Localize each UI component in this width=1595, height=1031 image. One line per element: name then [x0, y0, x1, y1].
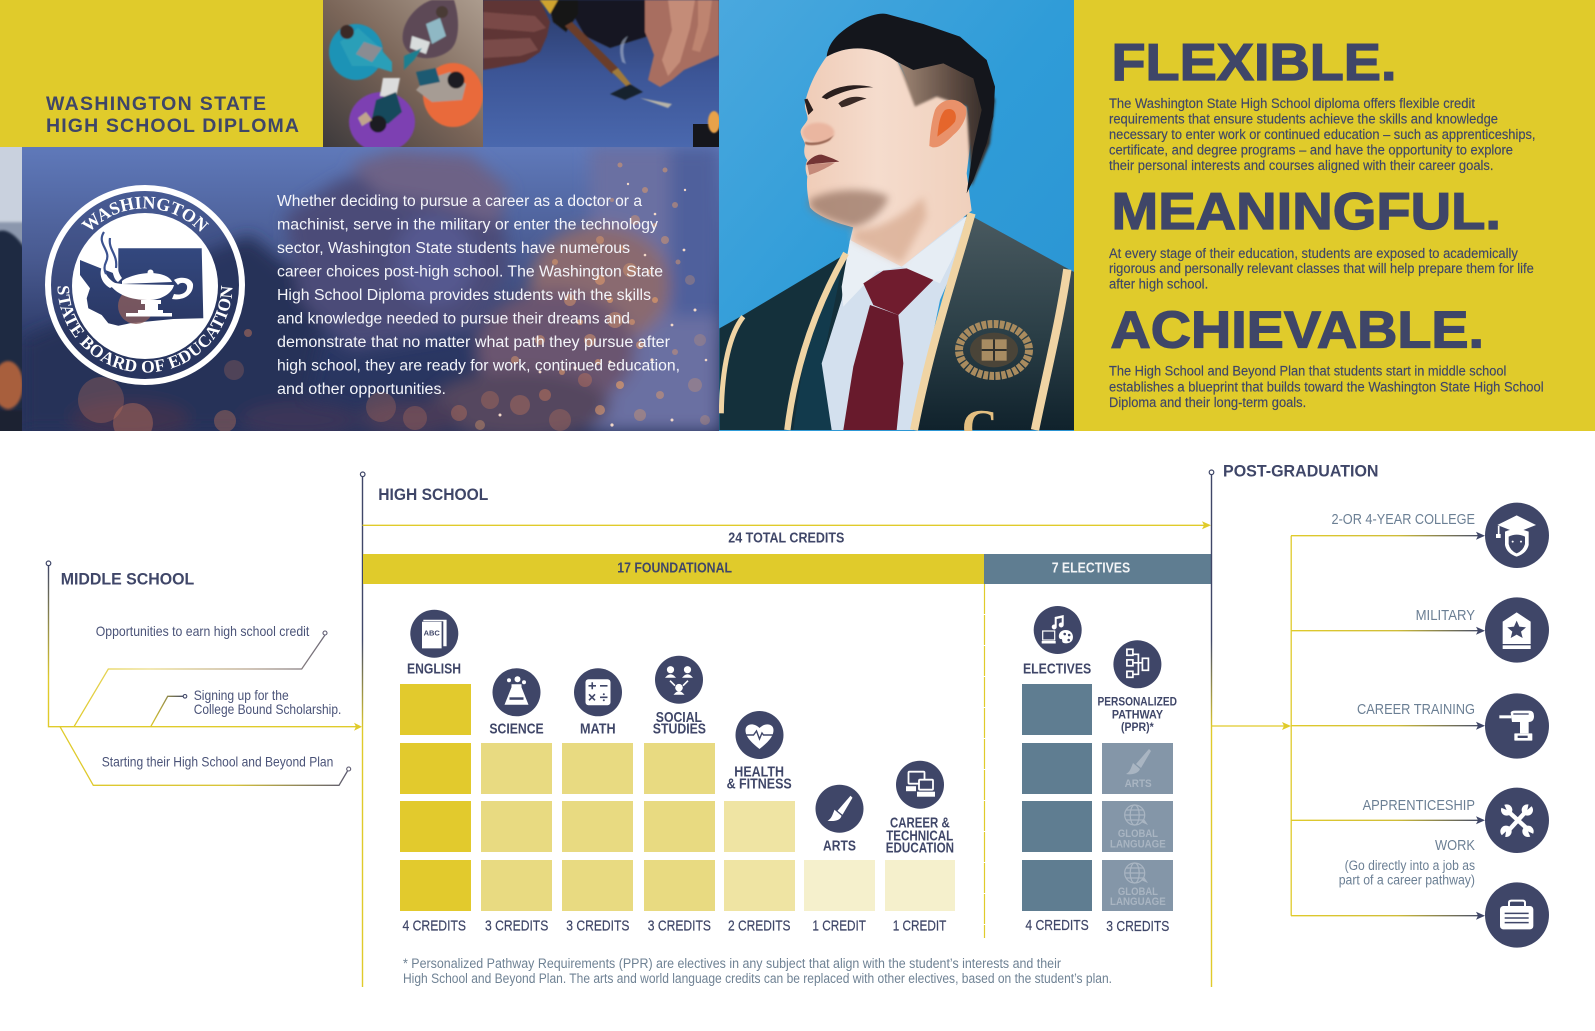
state outline: [80, 248, 203, 326]
column: english: [400, 610, 471, 934]
text: flexible: [1109, 96, 1536, 173]
heading: high school: HIGH SCHOOL: [378, 485, 488, 504]
bar: electives: [984, 554, 1211, 584]
heading: post-graduation: POST-GRADUATION: [1223, 462, 1378, 481]
column: science: [481, 668, 552, 934]
tie: [863, 268, 933, 315]
label: career training: CAREER TRAINING: [1357, 701, 1475, 718]
footnote: High School and Beyond Plan. The arts and world language credits can be replaced with other electives, based on the student’s plan.: [403, 971, 1112, 986]
title: HIGH SCHOOL DIPLOMA: [46, 115, 299, 137]
intro paragraph: sector, Washington State students have numerous: [277, 240, 630, 257]
icon: paint brush: [816, 785, 864, 833]
panel: flexible meaningful achievable: [1074, 0, 1595, 431]
icon: briefcase: [1485, 882, 1549, 948]
column: health and fitness: 2 CREDITS: [728, 918, 790, 934]
arrow: [354, 723, 362, 731]
column: career and technical education: 1 CREDIT: [893, 918, 946, 934]
intro paragraph: career choices post-high school. The Washington State: [277, 264, 663, 280]
text: meaningful: [1109, 246, 1534, 292]
intro paragraph: and knowledge needed to pursue their dreams and: [277, 310, 630, 328]
column: social studies: [644, 656, 715, 934]
intro paragraph: [277, 193, 680, 398]
icon: wrenches: [1485, 788, 1549, 853]
column: health and fitness: [724, 711, 795, 934]
connector: high school credit: [74, 635, 325, 727]
label: work: [1339, 837, 1475, 887]
bar: foundational: 17 FOUNDATIONAL: [617, 561, 732, 577]
text: scholarship: College Bound Scholarship.: [194, 701, 341, 717]
tile: global language: LANGUAGE: [1110, 838, 1166, 850]
panel: title block: [0, 0, 323, 147]
column: career and technical education: TECHNICAL: [886, 827, 953, 844]
intro paragraph: Whether deciding to pursue a career as a doctor or a: [277, 193, 642, 210]
column: career and technical education: CAREER &: [890, 815, 950, 832]
intro paragraph: and other opportunities.: [277, 381, 446, 398]
column: arts: ARTS: [823, 838, 856, 855]
column: science: 3 CREDITS: [485, 918, 548, 934]
column: personalized pathway: (PPR)*: [1121, 720, 1154, 734]
column: electives: ELECTIVES: [1023, 661, 1091, 678]
ear: [929, 100, 966, 147]
text: flexible: their personal interests and courses aligned with their career goals.: [1109, 158, 1494, 173]
heading: middle school: MIDDLE SCHOOL: [61, 570, 194, 589]
label: apprenticeship: APPRENTICESHIP: [1363, 797, 1475, 814]
column: arts: 1 CREDIT: [812, 918, 866, 934]
column: english: ENGLISH: [407, 661, 461, 678]
text: meaningful: At every stage of their education, students are exposed to academically: [1109, 246, 1518, 261]
heading: meaningful: MEANINGFUL.: [1112, 183, 1501, 241]
column: math: 3 CREDITS: [566, 918, 629, 934]
text: scholarship: Signing up for the: [194, 687, 289, 703]
column: social studies: SOCIAL: [656, 709, 702, 726]
intro paragraph: High School Diploma provides students with the skills: [277, 287, 651, 304]
flame: [102, 232, 116, 274]
column: health and fitness: & FITNESS: [727, 776, 792, 793]
seal lettering: STATE BOARD OF EDUCATION: [58, 286, 233, 373]
branches: [1291, 536, 1484, 916]
photo: soldering: [483, 0, 720, 147]
column: career and technical education: EDUCATION: [886, 840, 954, 857]
tile: global language: GLOBAL: [1118, 828, 1158, 840]
tile: global language: LANGUAGE: [1110, 896, 1166, 908]
column: personalized pathway: [1098, 640, 1177, 935]
icon: military badge: [1485, 597, 1549, 663]
photo: students on beanbags: [323, 0, 483, 152]
label: work: WORK: [1435, 837, 1475, 854]
crest: [959, 324, 1029, 376]
text: achievable: The High School and Beyond Plan that students start in middle school: [1109, 364, 1506, 378]
column: health and fitness: HEALTH: [734, 764, 784, 781]
connector: beyond plan: [60, 727, 348, 785]
column: personalized pathway: PERSONALIZED: [1098, 694, 1177, 708]
tile: global language: [1102, 860, 1173, 911]
panel: post-graduation: [1209, 462, 1549, 987]
intro paragraph: demonstrate that no matter what path they pursue after: [277, 334, 670, 351]
icon: flowchart: [1113, 640, 1161, 688]
text: meaningful: rigorous and personally relevant classes that will help prepare them for life: [1109, 261, 1534, 276]
cream trim: [721, 213, 1067, 430]
nose shadow: [802, 123, 834, 143]
label: work: part of a career pathway): [1339, 872, 1475, 887]
column: math: [562, 668, 633, 934]
label: military: MILITARY: [1416, 607, 1475, 624]
column: personalized pathway: PATHWAY: [1112, 708, 1163, 722]
panel: intro band with photo background: [22, 147, 719, 431]
column: science: SCIENCE: [489, 721, 544, 738]
text: scholarship: [194, 687, 341, 717]
brow and eye: [822, 85, 873, 99]
tile: global language: GLOBAL: [1118, 886, 1158, 898]
seal lettering: WASHINGTON: [81, 196, 210, 232]
column: english: 4 CREDITS: [402, 918, 466, 934]
column: electives: 4 CREDITS: [1025, 918, 1089, 934]
text: meaningful: after high school.: [1109, 276, 1208, 292]
seal lettering: [58, 196, 233, 373]
text: achievable: establishes a blueprint that builds toward the Washington State High School: [1109, 380, 1544, 394]
icon: people network: [655, 656, 703, 704]
text: achievable: [1109, 364, 1544, 410]
icon: drill: [1485, 693, 1549, 759]
column: social studies: STUDIES: [653, 721, 706, 738]
bar: foundational: [363, 554, 984, 584]
text: flexible: certificate, and degree programs – and have the opportunity to explore: [1109, 142, 1513, 158]
column: electives: [1022, 606, 1092, 934]
heading: flexible: FLEXIBLE.: [1112, 34, 1396, 92]
arrow: total credits: [362, 521, 1211, 529]
footnote: [403, 956, 1112, 986]
column: math: MATH: [580, 721, 616, 738]
column: personalized pathway: 3 CREDITS: [1106, 919, 1169, 935]
bar: electives: 7 ELECTIVES: [1052, 561, 1130, 577]
icons: outcomes: [1485, 503, 1549, 948]
shirt: [822, 217, 967, 430]
icon: graduate: [1485, 503, 1549, 568]
gown letter: C: [962, 398, 998, 454]
icon: calculator: [574, 668, 622, 716]
column: career and technical education: [885, 761, 955, 934]
gown: [719, 253, 850, 430]
icon: book: ABC: [424, 629, 440, 638]
label: college: 2-OR 4-YEAR COLLEGE: [1332, 511, 1475, 528]
connector: scholarship: [151, 696, 183, 727]
footnote: * Personalized Pathway Requirements (PPR) are electives in any subject that align with the student’s interests and their: [403, 956, 1061, 971]
panel: high school: [360, 472, 1211, 987]
text: beyond plan: Starting their High School and Beyond Plan: [102, 754, 333, 770]
lamp: [101, 256, 193, 316]
icon: book: [410, 610, 458, 658]
tile: arts: [1102, 743, 1173, 794]
text: achievable: Diploma and their long-term goals.: [1109, 395, 1306, 410]
photo: graduate student: [719, 0, 1077, 454]
intro paragraph: high school, they are ready for work, continued education,: [277, 358, 680, 374]
tile: global language: [1102, 801, 1173, 852]
tile: arts: ARTS: [1125, 778, 1152, 790]
label: work: (Go directly into a job as: [1345, 858, 1475, 873]
icon: heart: [736, 711, 784, 759]
icon: computers: [896, 761, 944, 809]
arrow heads: [1476, 532, 1485, 920]
title: [46, 93, 299, 137]
icon: flask: [492, 668, 540, 716]
title: WASHINGTON STATE: [46, 93, 266, 115]
text: high school credit: Opportunities to earn high school credit: [96, 623, 309, 639]
heading: achievable: ACHIEVABLE.: [1110, 302, 1484, 360]
fade and hair: [896, 62, 997, 187]
icon: music laptop palette: [1034, 606, 1082, 654]
panel: middle school: [46, 561, 362, 785]
photo strip: left edge: [0, 147, 22, 431]
text: flexible: requirements that ensure students achieve the skills and knowledge: [1109, 112, 1498, 126]
mouth: [807, 155, 839, 165]
column: arts: [804, 785, 875, 934]
logo: State Board of Education seal: [45, 185, 245, 385]
label: total credits: 24 TOTAL CREDITS: [728, 531, 845, 547]
column: social studies: 3 CREDITS: [648, 918, 711, 934]
bokeh lights: [78, 329, 592, 431]
text: flexible: The Washington State High School diploma offers flexible credit: [1109, 96, 1475, 111]
neck and face: [801, 48, 972, 267]
arrow: into pathways: [1212, 722, 1291, 730]
intro paragraph: machinist, serve in the military or enter the technology: [277, 216, 658, 234]
text: flexible: necessary to enter work or continued education – such as apprenticeships,: [1109, 127, 1536, 142]
